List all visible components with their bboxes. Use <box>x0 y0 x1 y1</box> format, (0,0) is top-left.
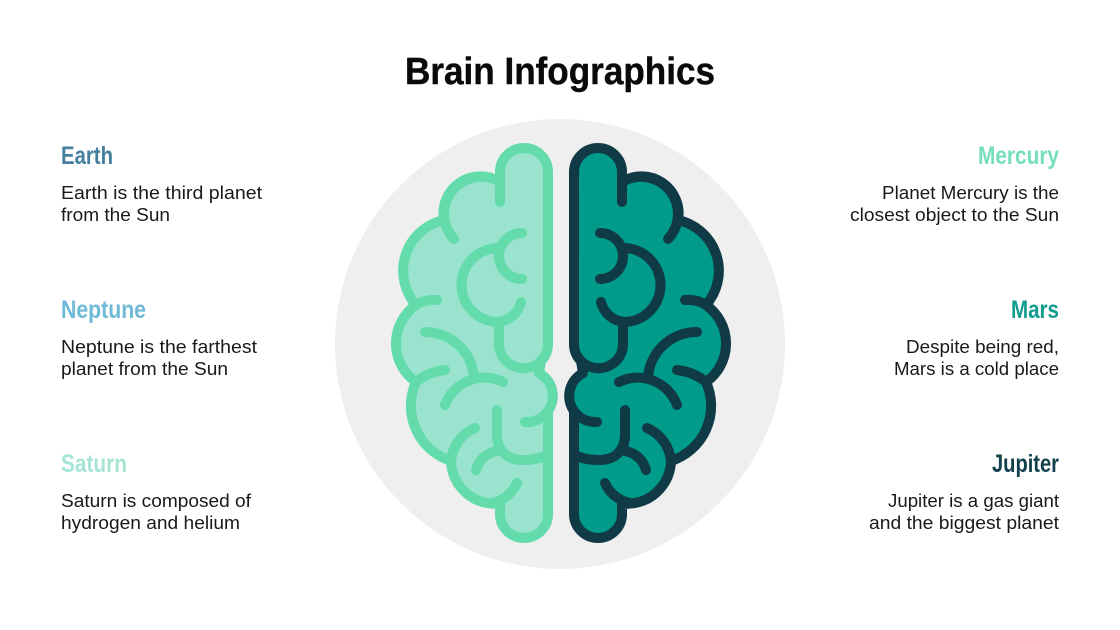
icon: brain left hemisphere <box>396 148 553 538</box>
text block: Earth: Earth is the third planet <box>61 183 262 203</box>
icon: brain right hemisphere <box>569 148 726 538</box>
text block: Saturn: Saturn is composed of <box>61 491 252 511</box>
text block: Neptune: planet from the Sun <box>61 359 228 379</box>
text block: Mercury: closest object to the Sun <box>850 205 1059 225</box>
text block: Earth: from the Sun <box>61 205 170 225</box>
text block: Saturn <box>61 450 252 533</box>
text block: Jupiter: and the biggest planet <box>869 513 1059 533</box>
text block: Earth <box>61 142 262 225</box>
text block: Neptune: Neptune <box>61 296 146 324</box>
title: Brain Infographics <box>405 51 715 93</box>
text block: Saturn: Saturn <box>61 450 127 478</box>
text block: Mars: Mars <box>1011 296 1059 324</box>
text block: Neptune <box>61 296 257 379</box>
background circle <box>335 119 785 569</box>
text block: Earth: Earth <box>61 142 113 170</box>
text block: Mercury <box>850 142 1059 225</box>
text block: Mars: Despite being red, <box>906 337 1059 357</box>
text block: Jupiter <box>869 450 1059 533</box>
text block: Jupiter: Jupiter <box>992 450 1059 478</box>
text block: Mars: Mars is a cold place <box>894 359 1059 379</box>
text block: Neptune: Neptune is the farthest <box>61 337 257 357</box>
text block: Saturn: hydrogen and helium <box>61 513 240 533</box>
text block: Mars <box>894 296 1059 379</box>
text block: Jupiter: Jupiter is a gas giant <box>888 491 1059 511</box>
text block: Mercury: Planet Mercury is the <box>882 183 1059 203</box>
text block: Mercury: Mercury <box>978 142 1059 170</box>
